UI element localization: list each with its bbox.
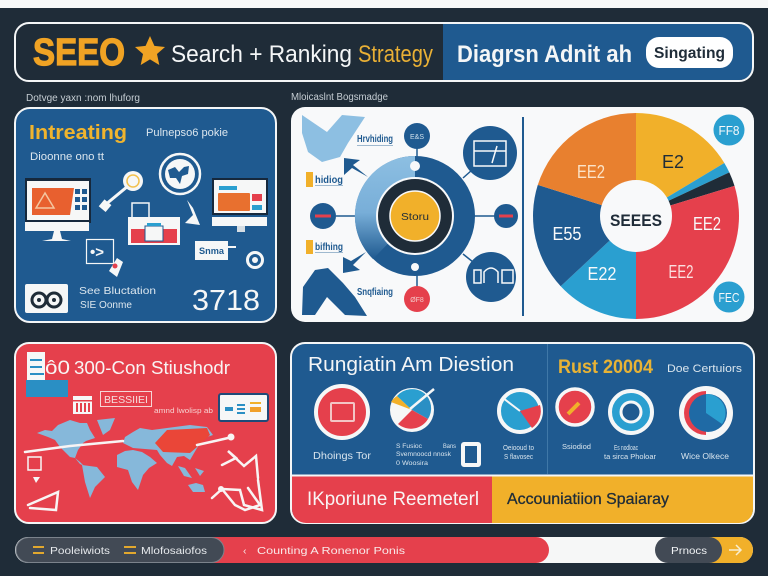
- circle captions: Wice Olkece: [681, 451, 729, 461]
- labels: bifhing: [315, 241, 343, 253]
- icon: left monitor: [25, 178, 91, 241]
- band: red: [292, 476, 492, 523]
- node bottom: [404, 286, 430, 312]
- caption left: Dotvge yaxn :nom lhuforg: [26, 93, 140, 104]
- dark nav segment: [16, 538, 224, 562]
- divider: [522, 117, 524, 316]
- title: Search + Ranking: [171, 41, 352, 68]
- pie chart: E22: [588, 264, 616, 284]
- mini card: [219, 394, 268, 421]
- node top: E&S: [410, 134, 424, 141]
- badge top: [714, 114, 744, 146]
- icon: window: [316, 386, 368, 438]
- band: yellow: [492, 476, 753, 523]
- small note: amnd lwolisp ab: [154, 406, 213, 415]
- icon: key connector: [99, 171, 143, 212]
- panel: diagram and pie: [291, 107, 754, 322]
- circle captions: S flavosec: [504, 454, 533, 461]
- dark nav segment: Pooleiwiots: [50, 545, 110, 557]
- caption right: Mloicaslnt Bogsmadge: [291, 92, 388, 103]
- panel heading: Rungiatin Am Diestion: [308, 354, 514, 376]
- node right: [494, 204, 518, 228]
- title: SEEO: [33, 32, 125, 74]
- labels: [306, 133, 393, 298]
- icon: goggles card: [25, 284, 68, 313]
- pie chart: EE2: [577, 162, 605, 182]
- icon: arrow right: [729, 545, 741, 555]
- labels: hidiog: [315, 174, 343, 186]
- panel heading: 300-Con Stiushodr: [74, 358, 230, 378]
- icon: donut: [679, 386, 733, 440]
- header pill: [646, 37, 733, 68]
- icon: tablet: [463, 444, 479, 465]
- icon: right monitor: [212, 178, 268, 232]
- tag: BESSIIEI: [104, 394, 148, 406]
- circle captions: Bans: [443, 443, 457, 450]
- icon: globe: [160, 154, 200, 194]
- node bottom: ØF8: [410, 297, 424, 304]
- pie chart: EE2: [668, 262, 694, 282]
- shape: dark blue corner: [302, 268, 367, 316]
- icon: small triangle: [33, 477, 40, 483]
- node left: [310, 203, 336, 229]
- arrows: [343, 158, 368, 273]
- world map: [25, 418, 262, 510]
- bottom navigation bar: [15, 537, 753, 563]
- icon: gauge: [499, 390, 541, 432]
- labels: Snqfiaing: [357, 286, 393, 298]
- panel: ranking: [291, 343, 754, 523]
- big number: 3718: [192, 285, 260, 317]
- year heading: Rust 20004: [558, 357, 653, 378]
- tag: [100, 392, 152, 406]
- panel heading: Intreating: [29, 122, 127, 144]
- circle captions: Oeiooud to: [503, 445, 534, 452]
- connectors: [336, 145, 496, 288]
- circle captions: S Fusioc: [396, 443, 423, 450]
- panel: world map: [15, 343, 276, 523]
- header banner: [15, 23, 753, 81]
- shape: light blue corner: [302, 115, 365, 162]
- labels: Hrvhiding: [357, 133, 393, 145]
- dark nav segment: Mlofosaiofos: [141, 545, 207, 557]
- header pill: Singating: [654, 45, 725, 62]
- title: [33, 32, 433, 74]
- icon: small square: [28, 457, 41, 470]
- icon: pie: [390, 388, 434, 432]
- icon: tagged box: [86, 240, 123, 277]
- hub diagram: Storu: [401, 212, 429, 223]
- icon: pencil: [557, 389, 593, 425]
- red progress segment: ‹: [243, 545, 247, 557]
- next button: [655, 537, 753, 563]
- icon: calendar: [73, 396, 92, 414]
- icon: target: [248, 252, 262, 268]
- icon: tagged box: •>: [90, 244, 104, 261]
- icon: toolbox: [128, 203, 180, 245]
- panel: interacting: [15, 108, 276, 322]
- pie chart: E2: [662, 152, 684, 172]
- pie chart: EE2: [693, 214, 721, 234]
- pie chart: E55: [552, 224, 582, 244]
- pie chart: SEEES: [610, 211, 662, 230]
- badge bottom: FEC: [718, 290, 740, 305]
- node top: [404, 123, 430, 149]
- hub diagram: [355, 156, 475, 276]
- caption text: SIE Oonme: [80, 299, 132, 311]
- icon: star: [135, 36, 165, 65]
- next button: Prnocs: [671, 545, 707, 557]
- circle captions: Dhoings Tor: [313, 451, 372, 462]
- side note: Doe Certuiors: [667, 363, 743, 375]
- node chart: [463, 126, 517, 180]
- panel heading: ô0: [45, 358, 70, 379]
- band: red: IKporiune Reemeterl: [307, 489, 479, 510]
- circle captions: ta sirca Pholoar: [604, 454, 657, 461]
- circle captions: 0 Woosira: [396, 460, 428, 467]
- badge top: FF8: [718, 123, 740, 138]
- caption text: See Bluctation: [79, 285, 156, 297]
- circle captions: [313, 443, 729, 467]
- vertical divider: [547, 344, 548, 474]
- band: yellow: Accouniatiion Spaiaray: [507, 491, 669, 508]
- header subtitle: Diagrsn Adnit ah: [457, 41, 632, 68]
- icon: document: [26, 352, 68, 397]
- panel note: Pulnepso6 pokie: [146, 127, 228, 139]
- node speech: [466, 252, 516, 302]
- red progress segment: [150, 537, 549, 563]
- caption text: [79, 285, 156, 311]
- badge bottom: [714, 282, 744, 312]
- circle captions: Svemnoocd nnosk: [396, 451, 452, 458]
- pie chart: [533, 113, 739, 319]
- panel subheading: Dioonne ono tt: [30, 151, 104, 163]
- label box: [195, 241, 236, 260]
- circle captions: Ssiodiod: [562, 444, 591, 451]
- title: Strategy: [358, 41, 433, 68]
- icon: ring: [610, 391, 652, 433]
- label box: Snma: [199, 246, 225, 257]
- circle captions: Es nodloac: [614, 445, 638, 452]
- icon: arrow: [185, 200, 200, 225]
- red progress segment: Counting A Ronenor Ponis: [257, 545, 405, 557]
